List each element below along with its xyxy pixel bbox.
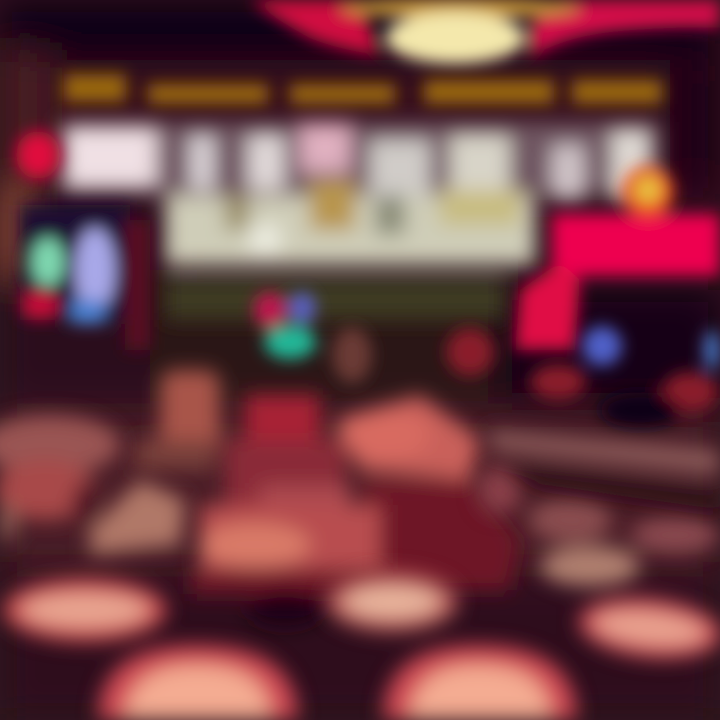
right booth screens <box>530 326 720 428</box>
icon: chandelier <box>340 0 580 64</box>
heading: white title <box>60 122 660 320</box>
heading band: yellow <box>64 74 662 104</box>
central red and pink furniture <box>135 370 520 626</box>
icon: centre slot lights <box>254 292 494 383</box>
red booth on right <box>16 131 720 350</box>
icon: left slot machine <box>20 205 150 350</box>
right counter stripes <box>490 430 720 510</box>
ceiling and red canopy <box>250 0 720 64</box>
floor pattern tiles <box>0 415 720 720</box>
